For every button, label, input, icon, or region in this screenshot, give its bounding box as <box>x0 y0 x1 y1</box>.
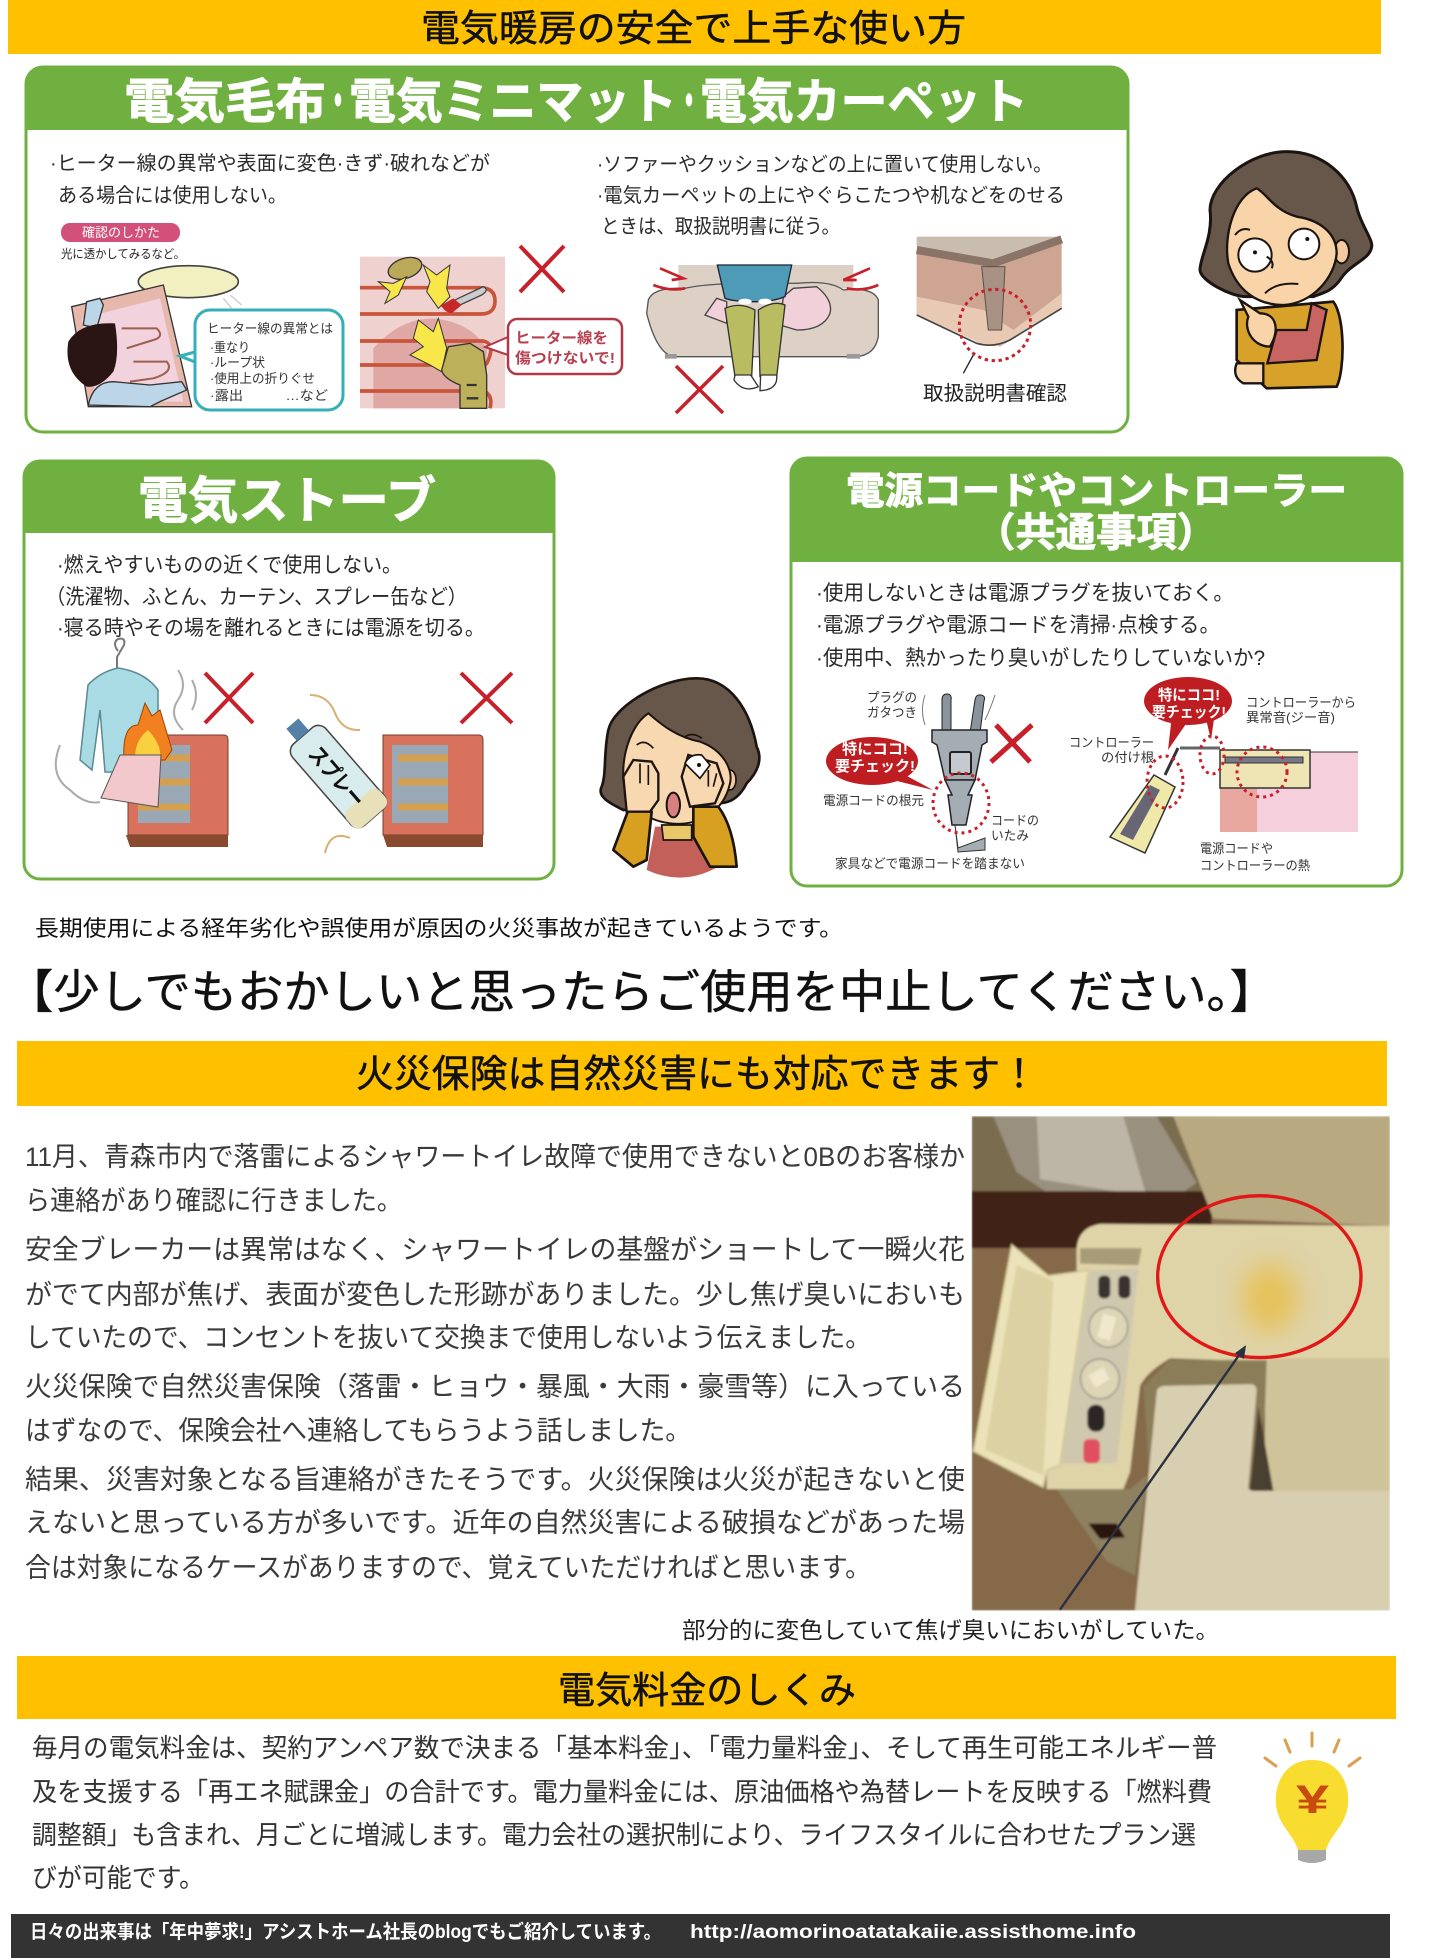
text: electricity pricing explanation: 毎月の電気料金は、契約アンペア数で決まる「基本料金」、「電力量料金」、そして再生可能エネルギー普 <box>32 1733 1217 1763</box>
text: cord warnings: ·使用しないときは電源プラグを抜いておく。 <box>816 582 1234 605</box>
text: cord warnings: ·使用中、熱かったり臭いがしたりしていないか? <box>816 647 1265 670</box>
panel frame <box>791 458 1402 886</box>
arrow: points to discolouration <box>1060 1345 1246 1610</box>
panel header: 電気毛布 <box>124 76 326 129</box>
text: right warnings: ときは、取扱説明書に従う。 <box>601 215 840 238</box>
text: left warnings: ある場合には使用しない。 <box>58 184 287 207</box>
icon: light bulb with yen: ¥ <box>1296 1778 1330 1822</box>
callout: heater wire abnormalities: ·露出 …など <box>210 388 328 403</box>
label: check manual: 取扱説明書確認 <box>923 382 1067 405</box>
callout: do not damage wires: 傷つけないで! <box>515 349 615 367</box>
text: photo caption: 部分的に変色していて焦げ臭いにおいがしていた。 <box>682 1617 1219 1643</box>
text: electricity pricing explanation: 及を支援する「再エネ賦課金」の合計です。電力量料金には、原油価格や為替レートを反映する「燃料費 <box>32 1777 1212 1807</box>
illustration: spray can by heater: スプレー <box>303 741 370 812</box>
panel header <box>23 460 555 533</box>
illustration: damaged heater wires <box>360 253 505 408</box>
title banner: 電気暖房の安全で上手な使い方 <box>421 8 966 49</box>
labels: plug diagram <box>823 690 1039 871</box>
illustration: plug and cord <box>922 694 995 852</box>
panel header <box>790 457 1403 562</box>
text: fire insurance story: 11月、青森市内で落雷によるシャワートイレ故障で使用できないと0Bのお客様か <box>25 1142 965 1172</box>
footer bar with blog link: http://aomorinoatatakaiie.assisthome.info <box>690 1922 1136 1943</box>
callout: check here, plug <box>826 737 933 790</box>
panel header: 電気カーペット <box>700 76 1028 129</box>
text: fire insurance story: はずなので、保険会社へ連絡してもらうよう話しました。 <box>25 1416 691 1446</box>
badge: how to check <box>61 223 185 261</box>
text: stove warnings: ·寝る時やその場を離れるときには電源を切る。 <box>57 617 485 640</box>
labels: plug diagram: いたみ <box>991 828 1029 843</box>
icon: red cross <box>520 246 564 292</box>
title banner <box>8 0 1381 54</box>
illustration: person sitting on cushion on sofa <box>647 265 878 391</box>
panel: power cord and controller <box>790 457 1403 886</box>
text: fire insurance story: 安全ブレーカーは異常はなく、シャワートイレの基盤がショートして一瞬火花 <box>25 1235 965 1265</box>
text: cord warnings <box>816 582 1265 670</box>
panel header: 電源コードやコントローラー <box>846 471 1347 513</box>
callout: do not damage wires: ヒーター線を <box>515 329 608 347</box>
callout: heater wire abnormalities: ヒーター線の異常とは <box>207 321 333 336</box>
text: cord warnings: ·電源プラグや電源コードを清掃·点検する。 <box>816 614 1220 637</box>
text: fire insurance story: 結果、災害対象となる旨連絡がきたそうです。火災保険は火災が起きないと使 <box>25 1465 965 1495</box>
section banner: electricity pricing: 電気料金のしくみ <box>558 1670 856 1711</box>
callout: check here, plug: 特にココ! <box>842 740 908 758</box>
icon: red cross <box>205 673 253 723</box>
labels: controller diagram: の付け根 <box>1101 750 1154 765</box>
icon: red cross <box>461 673 512 723</box>
icon: red cross <box>676 366 723 413</box>
section banner: electricity pricing <box>17 1656 1396 1719</box>
panel header: ・ <box>326 76 350 129</box>
text: stop-use message: 【少しでもおかしいと思ったらご使用を中止してください。】 <box>7 966 1276 1018</box>
text: fire insurance story: 合は対象になるケースがありますので、覚えていただければと思います。 <box>25 1553 871 1583</box>
callout: heater wire abnormalities: ·使用上の折りぐせ <box>210 371 315 386</box>
character: worried woman <box>1200 152 1372 388</box>
badge: how to check: 光に透かしてみるなど。 <box>61 247 185 261</box>
text: stove warnings: （洗濯物、ふとん、カーテン、スプレー缶など） <box>46 586 467 609</box>
labels: plug diagram: 電源コードの根元 <box>823 793 924 808</box>
text: fire insurance story: えないと思っている方が多いです。近年の自然災害による破損などがあった場 <box>25 1508 965 1538</box>
character: startled woman covering face <box>601 678 759 878</box>
text: stove warnings: ·燃えやすいものの近くで使用しない。 <box>57 554 402 577</box>
labels: controller diagram: コントローラーから <box>1246 695 1356 710</box>
text: right warnings <box>597 153 1065 238</box>
callout: check here, controller: 要チェック! <box>1152 704 1226 721</box>
panel header: ・ <box>677 76 701 129</box>
footer bar with blog link <box>11 1914 1390 1958</box>
illustration: table on carpet <box>917 237 1062 373</box>
section banner: fire insurance: 火災保険は自然災害にも対応できます！ <box>356 1054 1038 1096</box>
illustration: spray can by heater <box>276 695 483 853</box>
callout: check here, controller: 特にココ! <box>1158 686 1220 704</box>
callout: do not damage wires <box>485 319 622 374</box>
icon: light bulb with yen <box>1265 1733 1360 1863</box>
text: electricity pricing explanation: 調整額」も含まれ、月ごとに増減します。電力会社の選択制により、ライフスタイルに合わせたプラン選 <box>32 1820 1196 1850</box>
panel: electric blanket, mini mat, carpet <box>25 66 1129 432</box>
badge: how to check: 確認のしかた <box>82 225 160 240</box>
labels: plug diagram: ガタつき <box>867 705 917 720</box>
text: fire insurance story <box>25 1142 965 1583</box>
callout: check here, controller <box>1144 677 1232 750</box>
labels: controller diagram <box>1069 695 1356 873</box>
text: accident note: 長期使用による経年劣化や誤使用が原因の火災事故が起きているようです。 <box>35 916 843 941</box>
panel header: 電気ストーブ <box>138 473 436 529</box>
panel header: 電気ミニマット <box>349 76 677 129</box>
text: right warnings: ·電気カーペットの上にやぐらこたつや机などをのせる <box>597 184 1065 207</box>
text: electricity pricing explanation: びが可能です。 <box>32 1863 204 1893</box>
illustration: controller on table <box>1110 736 1358 853</box>
text: left warnings <box>50 152 490 207</box>
callout: check here, plug: 要チェック! <box>835 758 915 775</box>
labels: plug diagram: 家具などで電源コードを踏まない <box>835 856 1025 871</box>
panel frame <box>24 461 554 879</box>
text: right warnings: ·ソファーやクッションなどの上に置いて使用しない。 <box>597 153 1052 176</box>
panel: electric stove <box>23 460 555 879</box>
labels: controller diagram: コントローラー <box>1069 735 1154 750</box>
callout: heater wire abnormalities: ·ループ状 <box>210 355 265 370</box>
panel header <box>25 66 1129 130</box>
labels: plug diagram: プラグの <box>867 690 917 705</box>
panel frame <box>26 67 1128 432</box>
icon: red cross <box>991 725 1032 762</box>
callout: heater wire abnormalities: ·重なり <box>210 340 250 355</box>
labels: controller diagram: コントローラーの熱 <box>1200 858 1310 873</box>
panel header: （共通事項） <box>975 511 1217 555</box>
section banner: fire insurance <box>17 1041 1387 1106</box>
text: fire insurance story: ら連絡があり確認に行きました。 <box>25 1186 402 1216</box>
labels: plug diagram: コードの <box>991 813 1039 828</box>
callout: heater wire abnormalities <box>180 310 343 410</box>
photo: discoloured shower toilet seat <box>972 1116 1390 1611</box>
illustration: sweater catching fire by heater <box>56 639 228 847</box>
labels: controller diagram: 異常音(ジー音) <box>1246 710 1335 725</box>
text: electricity pricing explanation <box>32 1733 1217 1893</box>
footer bar with blog link: 日々の出来事は「年中夢求!」アシストホーム社長のblogでもご紹介しています。 <box>30 1920 661 1943</box>
text: fire insurance story: がでて内部が焦げ、表面が変色した形跡がありました。少し焦げ臭いにおいも <box>25 1280 965 1310</box>
labels: controller diagram: 電源コードや <box>1200 841 1273 856</box>
text: fire insurance story: 火災保険で自然災害保険（落雷・ヒョウ・暴風・大雨・豪雪等）に入っている <box>25 1372 965 1402</box>
text: stove warnings <box>46 554 485 640</box>
text: fire insurance story: していたので、コンセントを抜いて交換まで使用しないよう伝えました。 <box>25 1323 871 1353</box>
illustration: person checking blanket under lamp <box>67 266 242 407</box>
text: left warnings: ·ヒーター線の異常や表面に変色·きず·破れなどが <box>50 152 490 175</box>
